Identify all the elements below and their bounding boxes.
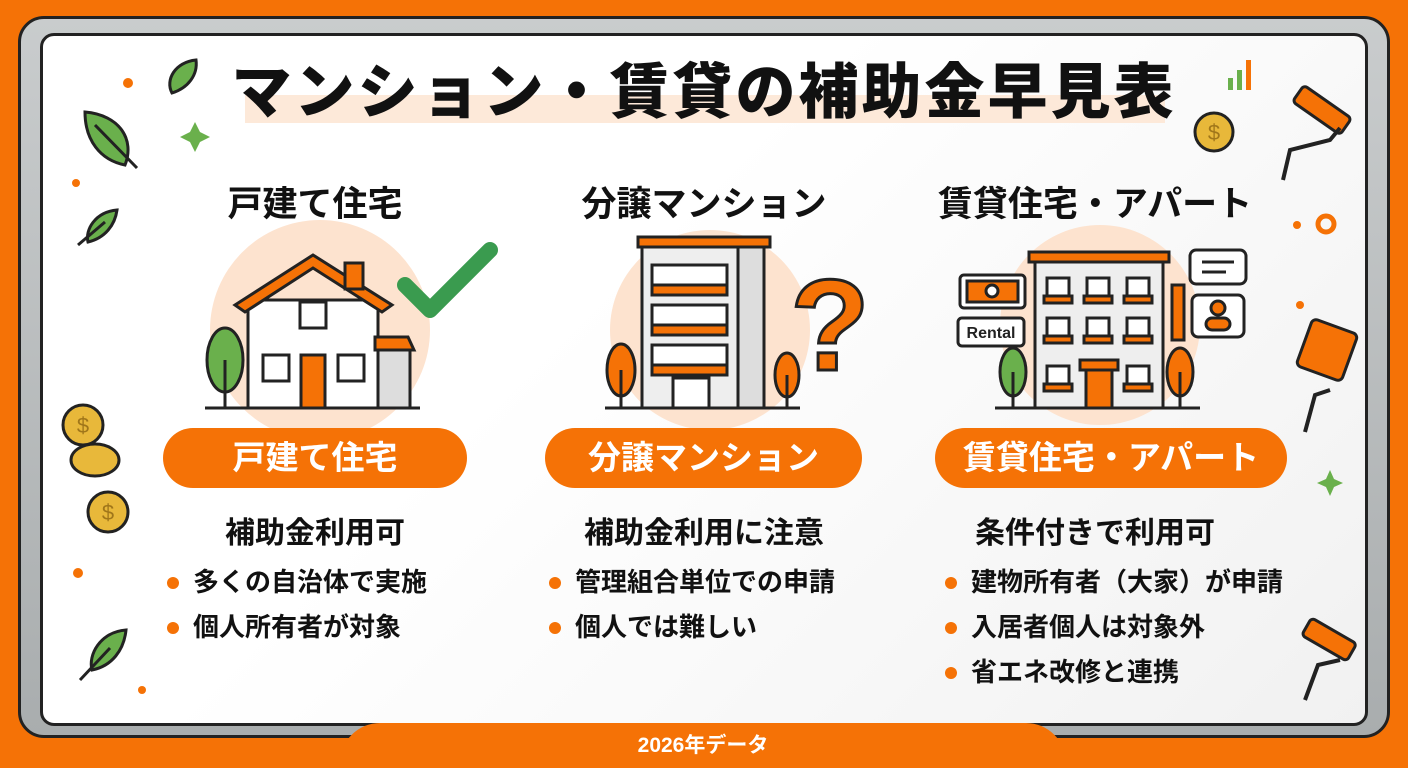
footer tab: 2026年データ (638, 734, 768, 757)
list: detached: 多くの自治体で実施 (193, 567, 427, 597)
heading: condominium: 分譲マンション (581, 185, 826, 224)
title highlight (245, 95, 1165, 123)
list: condo: 管理組合単位での申請 (575, 567, 835, 597)
icon: rental building: Rental (967, 325, 1015, 342)
icon: house with check (205, 220, 490, 440)
list: detached: 個人所有者が対象 (193, 612, 401, 642)
list: detached (167, 567, 427, 642)
footer tab (340, 723, 1066, 768)
title: マンション・賃貸の補助金早見表 (232, 59, 1176, 126)
icon: condo with question: ? (790, 252, 870, 398)
subheading: rental: 条件付きで利用可 (975, 517, 1215, 550)
list: rental: 省エネ改修と連携 (971, 657, 1179, 687)
pill: condo: 分譲マンション (588, 439, 819, 476)
pill: detached: 戸建て住宅 (232, 439, 398, 476)
decorations: leaves, coins, rollers: $ (102, 500, 114, 525)
list: condo: 個人では難しい (575, 612, 757, 642)
subheading: condo: 補助金利用に注意 (584, 517, 824, 550)
icon: rental building (958, 225, 1246, 425)
heading: rental: 賃貸住宅・アパート (938, 185, 1252, 224)
list: rental (945, 567, 1283, 687)
pill: rental: 賃貸住宅・アパート (963, 439, 1259, 476)
pill: rental (935, 428, 1287, 488)
icon: condo with question (605, 230, 870, 430)
list: rental: 建物所有者（大家）が申請 (971, 567, 1283, 597)
pill: detached (163, 428, 467, 488)
decorations: leaves, coins, rollers (63, 60, 1358, 700)
decorations: leaves, coins, rollers: $ (77, 413, 89, 438)
heading: detached house: 戸建て住宅 (227, 185, 402, 224)
subheading: detached: 補助金利用可 (225, 517, 405, 550)
list: rental: 入居者個人は対象外 (971, 612, 1205, 642)
pill: condo (545, 428, 862, 488)
decorations: leaves, coins, rollers: $ (1208, 120, 1220, 145)
list: condo (549, 567, 835, 642)
